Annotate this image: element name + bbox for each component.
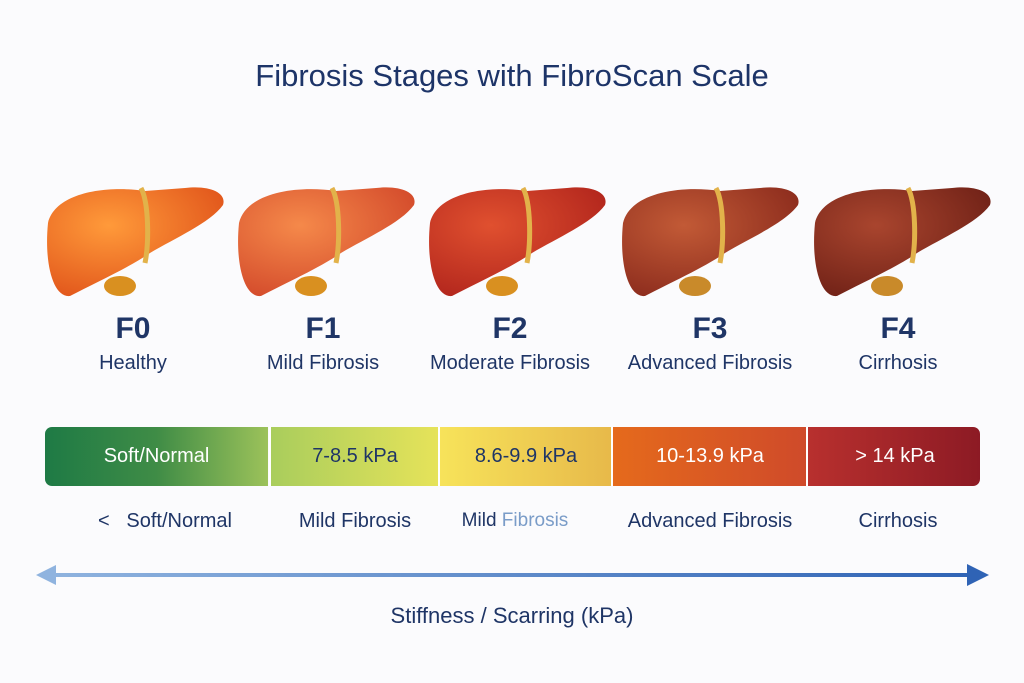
liver F4 bbox=[814, 187, 991, 296]
segment 8.6-9.9: 8.6-9.9 kPa bbox=[475, 445, 577, 467]
F1: Mild Fibrosis bbox=[267, 352, 379, 374]
F2: F2 bbox=[492, 312, 528, 345]
segment 7-8.5 bbox=[269, 427, 439, 486]
F4 bbox=[859, 312, 937, 374]
axis label: Stiffness / Scarring (kPa) bbox=[391, 603, 633, 628]
FibroScan scale bar bbox=[45, 427, 980, 486]
scale category labels: Mild Fibrosis bbox=[299, 510, 411, 532]
scale category labels bbox=[98, 510, 937, 532]
segment 10-13.9 bbox=[611, 427, 807, 486]
scale category labels: Mild Fibrosis bbox=[462, 510, 568, 531]
segment 10-13.9: 10-13.9 kPa bbox=[656, 445, 764, 467]
F0 bbox=[99, 312, 167, 374]
stage labels bbox=[99, 312, 937, 374]
F4: Cirrhosis bbox=[859, 352, 937, 374]
F3 bbox=[628, 312, 792, 374]
liver F1 bbox=[238, 187, 415, 296]
scale category labels: Advanced Fibrosis bbox=[628, 510, 792, 532]
F3: F3 bbox=[692, 312, 728, 345]
F1 bbox=[267, 312, 379, 374]
scale category labels: < Soft/Normal bbox=[98, 510, 232, 532]
title: Fibrosis Stages with FibroScan Scale bbox=[255, 58, 769, 93]
liver F2 bbox=[429, 187, 606, 296]
segment 7-8.5: 7-8.5 kPa bbox=[312, 445, 398, 467]
F1: F1 bbox=[305, 312, 340, 345]
segment >14: > 14 kPa bbox=[855, 445, 935, 467]
segment 8.6-9.9 bbox=[438, 427, 612, 486]
F2 bbox=[430, 312, 590, 374]
liver F3 bbox=[622, 187, 799, 296]
liver F0 bbox=[47, 187, 224, 296]
arrow: stiffness axis bbox=[36, 564, 989, 586]
F3: Advanced Fibrosis bbox=[628, 352, 792, 374]
segment soft/normal bbox=[45, 427, 268, 486]
F0: Healthy bbox=[99, 352, 167, 374]
livers illustration bbox=[47, 186, 991, 296]
F2: Moderate Fibrosis bbox=[430, 352, 590, 374]
F0: F0 bbox=[115, 312, 150, 345]
F4: F4 bbox=[880, 312, 916, 345]
segment >14 bbox=[806, 427, 982, 486]
scale category labels: Cirrhosis bbox=[859, 510, 937, 532]
segment soft/normal: Soft/Normal bbox=[104, 445, 209, 467]
